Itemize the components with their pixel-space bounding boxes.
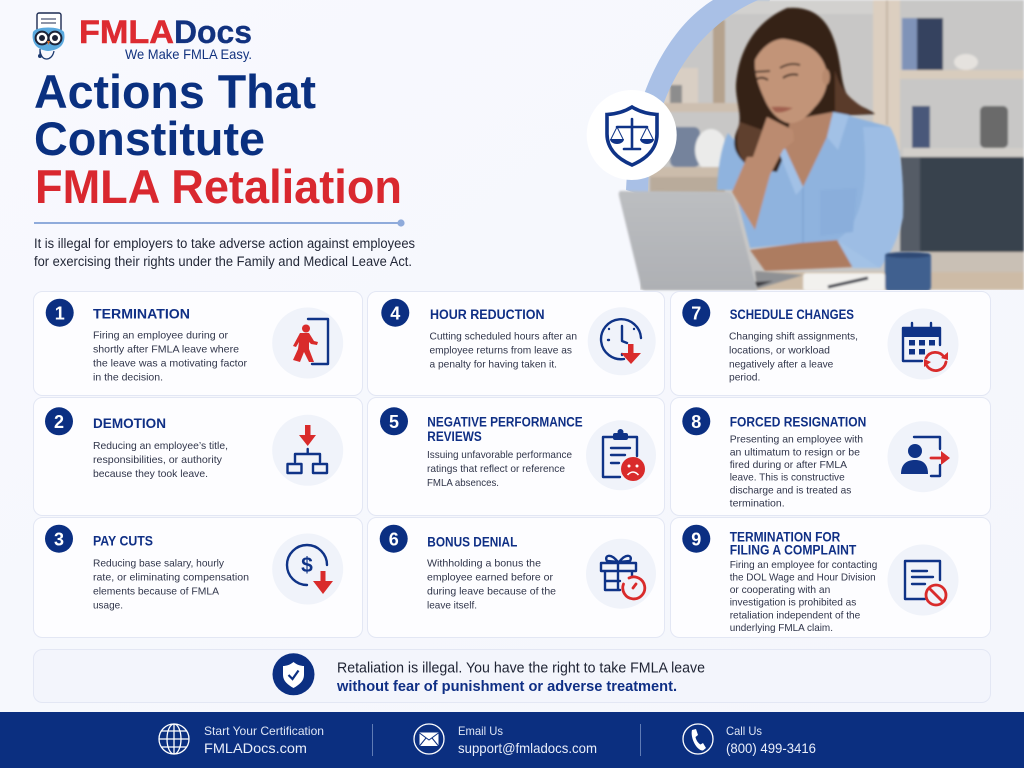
panel: 1 termination xyxy=(34,292,362,396)
panel: 9 termination for filing a complaint: investigation is prohibited as xyxy=(730,597,856,609)
panel: 3 pay cuts: 3 xyxy=(54,529,64,549)
icon: dollar with down arrow xyxy=(287,545,333,594)
panel: 6 bonus denial: employee earned before or xyxy=(427,571,553,583)
panel: 8 forced resignation: an ultimatum to resign or be xyxy=(730,446,860,458)
contact: phone: (800) 499-3416 xyxy=(726,740,816,756)
callout banner: without fear of punishment or adverse treatment. xyxy=(336,679,677,695)
panel: 9 termination for filing a complaint: FILING A COMPLAINT xyxy=(730,543,857,558)
panel: 9 termination for filing a complaint: retaliation independent of the xyxy=(730,609,860,621)
panel: 6 bonus denial: leave itself. xyxy=(427,599,477,611)
icon: calendar with sync arrows xyxy=(903,323,948,371)
face xyxy=(755,39,827,123)
forearm and hand xyxy=(732,117,794,230)
wordmark: FMLA xyxy=(79,14,174,50)
contact: website: Start Your Certification xyxy=(204,724,324,738)
panel: 2 demotion: responsibilities, or authority xyxy=(93,454,223,466)
panel: 8 forced resignation: 8 xyxy=(691,412,701,432)
panel: 8 forced resignation: termination. xyxy=(730,497,785,509)
panel: 4 hour reduction xyxy=(368,292,664,396)
panel: 4 hour reduction: 4 xyxy=(390,303,400,323)
icon: gift with clock xyxy=(601,556,645,599)
shield badge xyxy=(587,90,677,180)
panel: 3 pay cuts: usage. xyxy=(93,599,123,611)
panel: 2 demotion xyxy=(34,398,362,516)
panel: 3 pay cuts: elements because of FMLA xyxy=(93,585,219,597)
contact: email: Email Us xyxy=(458,724,503,738)
icon: shield check xyxy=(272,653,314,695)
panel: 9 termination for filing a complaint: Firing an employee for contacting xyxy=(730,559,877,571)
panel: 8 forced resignation: fired during or after FMLA xyxy=(730,459,847,471)
shirt xyxy=(716,114,889,249)
panel: 8 forced resignation: FORCED RESIGNATION xyxy=(730,415,866,430)
contact: email: support@fmladocs.com xyxy=(458,740,597,756)
title: Actions That xyxy=(34,65,316,118)
title: FMLA Retaliation xyxy=(35,160,402,213)
panel: 5 negative performance reviews: ratings that reflect or reference xyxy=(427,463,565,475)
panel: 9 termination for filing a complaint xyxy=(670,518,990,638)
eyes, lips xyxy=(753,71,770,72)
panel: 7 schedule changes: locations, or workload xyxy=(729,344,830,356)
panel: 8 forced resignation: leave. This is constructive xyxy=(730,472,845,484)
panel: 2 demotion: because they took leave. xyxy=(93,468,208,480)
callout banner: Retaliation is illegal. You have the right to take FMLA leave xyxy=(337,660,705,676)
panel: 5 negative performance reviews: 5 xyxy=(389,412,399,432)
title: Constitute xyxy=(34,112,265,165)
panel: 3 pay cuts: rate, or eliminating compensation xyxy=(93,571,249,583)
panel: 9 termination for filing a complaint: underlying FMLA claim. xyxy=(730,622,833,634)
panel: 1 termination: TERMINATION xyxy=(93,307,190,322)
panel: 7 schedule changes: Changing shift assignments, xyxy=(729,330,858,342)
panel: 8 forced resignation xyxy=(670,398,990,516)
intro text: It is illegal for employers to take adverse action against employees xyxy=(34,236,415,251)
panel: 6 bonus denial: BONUS DENIAL xyxy=(427,534,517,549)
logo: Docs xyxy=(174,14,252,50)
collar xyxy=(827,112,849,150)
icon: email xyxy=(414,724,444,754)
panel: 7 schedule changes: SCHEDULE CHANGES xyxy=(730,307,854,322)
icon: clipboard with sad face xyxy=(603,429,645,481)
icon: globe xyxy=(159,724,189,754)
panel: 5 negative performance reviews: Issuing unfavorable performance xyxy=(427,449,572,461)
title xyxy=(34,65,402,213)
panel: 8 forced resignation: discharge and is treated as xyxy=(730,484,851,496)
typing arm xyxy=(750,240,853,271)
icon: owl mascot xyxy=(33,13,64,59)
panel: 5 negative performance reviews: FMLA absences. xyxy=(427,477,499,489)
icon: dollar with down arrow: $ xyxy=(301,554,313,577)
panel: 3 pay cuts xyxy=(34,518,362,638)
contact: website: FMLADocs.com xyxy=(204,740,307,756)
panel: 6 bonus denial: 6 xyxy=(389,529,399,549)
panel: 5 negative performance reviews: NEGATIVE PERFORMANCE xyxy=(427,415,583,430)
icon: document with prohibition sign xyxy=(905,561,946,605)
panel: 2 demotion: DEMOTION xyxy=(93,416,166,431)
panel: 4 hour reduction: employee returns from leave as xyxy=(430,344,572,356)
panel: 1 termination: in the decision. xyxy=(93,371,163,383)
panel: 4 hour reduction: HOUR REDUCTION xyxy=(430,307,544,322)
panel: 7 schedule changes xyxy=(670,292,990,396)
panel: 1 termination: 1 xyxy=(55,303,65,323)
icon: org chart with down arrow xyxy=(288,425,327,473)
panel: 5 negative performance reviews: REVIEWS xyxy=(427,429,482,444)
panel: 6 bonus denial xyxy=(368,518,664,638)
contact: website xyxy=(204,724,324,756)
panel: 9 termination for filing a complaint: the DOL Wage and Hour Division xyxy=(730,571,876,583)
intro text: for exercising their rights under the Family and Medical Leave Act. xyxy=(34,254,412,269)
icon: person exiting door xyxy=(901,437,950,476)
panel: 6 bonus denial: Withholding a bonus the xyxy=(427,557,541,569)
panel: 9 termination for filing a complaint: 9 xyxy=(691,529,701,549)
icon: person leaving door xyxy=(293,319,328,364)
panel: 6 bonus denial: during leave because of the xyxy=(427,585,556,597)
panel: 1 termination: the leave was a motivating factor xyxy=(93,358,247,370)
panel: 7 schedule changes: 7 xyxy=(691,303,701,323)
panel: 4 hour reduction: a penalty for having taken it. xyxy=(430,358,557,370)
intro text xyxy=(34,236,415,269)
neck xyxy=(785,112,833,187)
panel: 1 termination: Firing an employee during or xyxy=(93,330,229,342)
panel: 7 schedule changes: period. xyxy=(729,372,760,384)
hero photo: woman at laptop xyxy=(619,0,1024,291)
panel: 3 pay cuts: PAY CUTS xyxy=(93,534,153,549)
panel: 7 schedule changes: negatively after a leave xyxy=(729,358,833,370)
contact: phone xyxy=(726,724,816,756)
panel: 1 termination: shortly after FMLA leave where xyxy=(93,344,239,356)
contact: email xyxy=(458,724,597,756)
panel: 2 demotion: 2 xyxy=(54,412,64,432)
panel: 2 demotion: Reducing an employee’s title, xyxy=(93,440,228,452)
panel: 8 forced resignation: Presenting an employee with xyxy=(730,433,863,445)
panel: 9 termination for filing a complaint: TERMINATION FOR xyxy=(730,529,841,544)
footer xyxy=(0,712,1024,768)
panel: 9 termination for filing a complaint: or cooperating with an xyxy=(730,584,830,596)
panel: 3 pay cuts: Reducing base salary, hourly xyxy=(93,557,225,569)
panel: 5 negative performance reviews xyxy=(368,398,664,516)
panel: 4 hour reduction: Cutting scheduled hours after an xyxy=(430,330,577,342)
icon: clock with down arrow xyxy=(601,319,641,364)
title divider xyxy=(34,219,405,227)
logo xyxy=(33,13,252,62)
tagline: We Make FMLA Easy. xyxy=(125,46,252,62)
icon: phone xyxy=(683,724,713,754)
contact: phone: Call Us xyxy=(726,724,762,738)
callout banner xyxy=(34,650,990,702)
hair xyxy=(734,8,875,172)
